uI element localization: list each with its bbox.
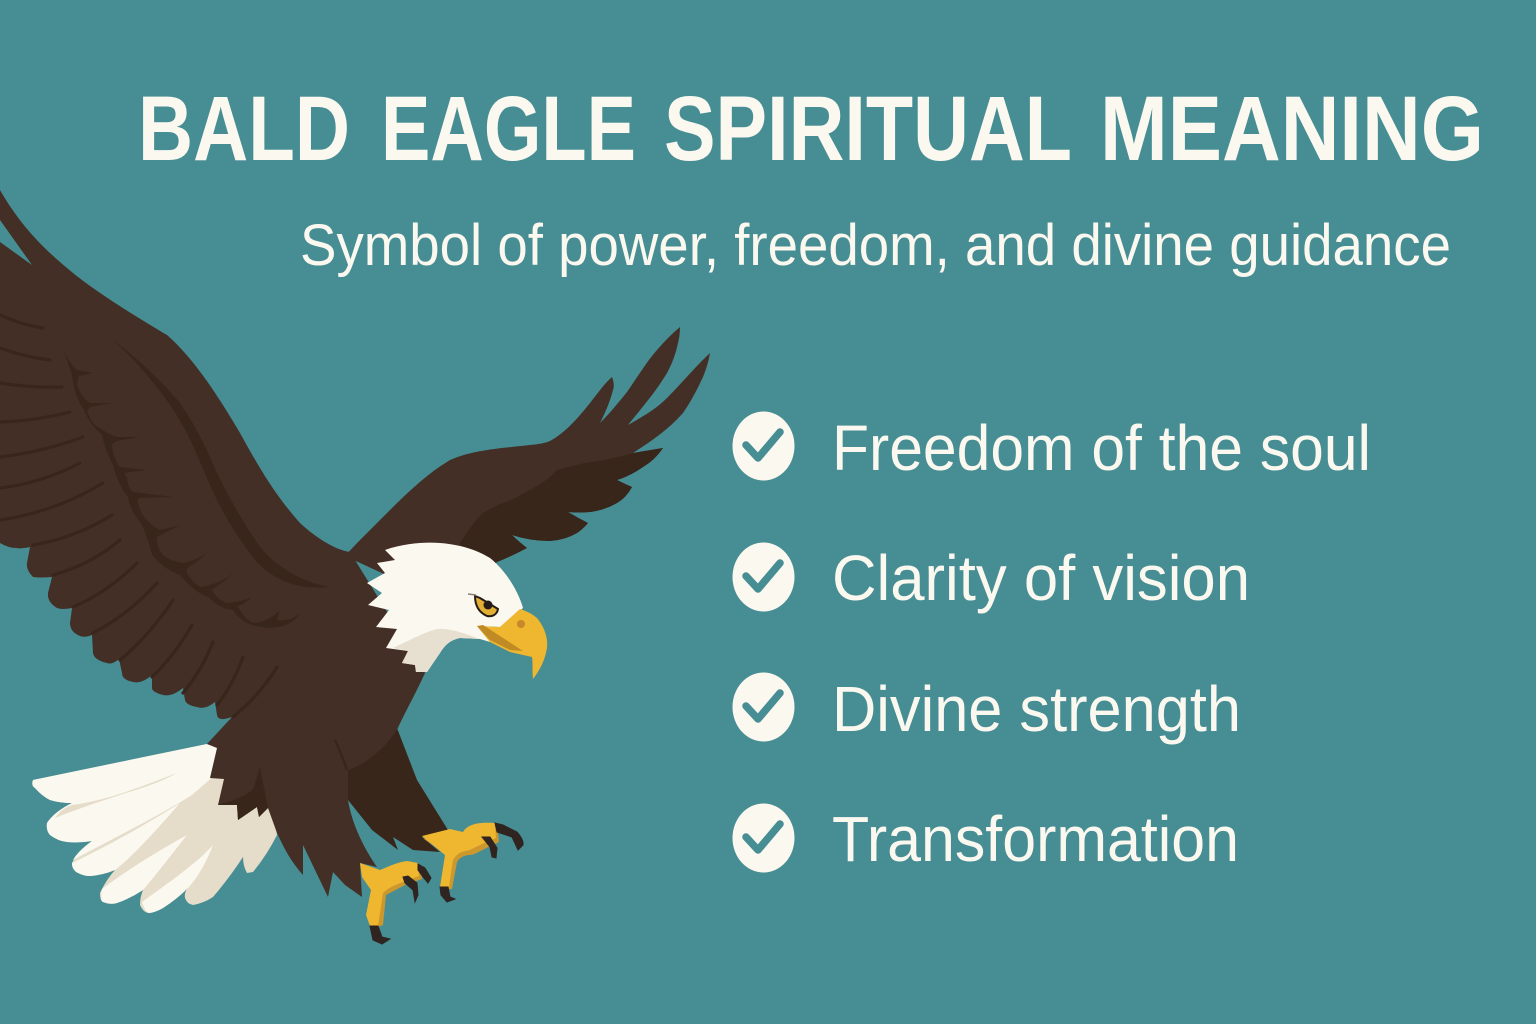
- list item: Transformation: Transformation: [832, 803, 1239, 875]
- title: [138, 78, 1484, 180]
- wing scalloped line: [63, 348, 300, 628]
- wing covert band: [113, 340, 330, 588]
- neck shading: [393, 629, 480, 672]
- title: EAGLE: [381, 78, 636, 180]
- list item: Freedom of the soul: Freedom of the soul: [832, 412, 1371, 484]
- list: meanings: [732, 412, 1371, 875]
- eagle left foot: [360, 861, 431, 944]
- subtitle: Symbol of power, freedom, and divine guidance: [300, 213, 1451, 278]
- wing feather lines: [0, 315, 277, 717]
- eagle tail feathers: [32, 744, 277, 913]
- title: BALD: [138, 78, 350, 180]
- eagle near wing and body: [0, 190, 425, 897]
- illustration: bald eagle: [0, 190, 710, 944]
- eye: [475, 596, 498, 616]
- eagle right foot: [422, 823, 523, 902]
- title: SPIRITUAL: [664, 78, 1072, 180]
- list item: Clarity of vision: Clarity of vision: [832, 542, 1250, 614]
- eagle leg shadow: [340, 728, 448, 852]
- eagle far wing: [345, 327, 710, 600]
- eagle head: [367, 543, 547, 679]
- beak: [477, 609, 547, 679]
- list item: Divine strength: Divine strength: [832, 673, 1241, 745]
- title: MEANING: [1100, 78, 1484, 180]
